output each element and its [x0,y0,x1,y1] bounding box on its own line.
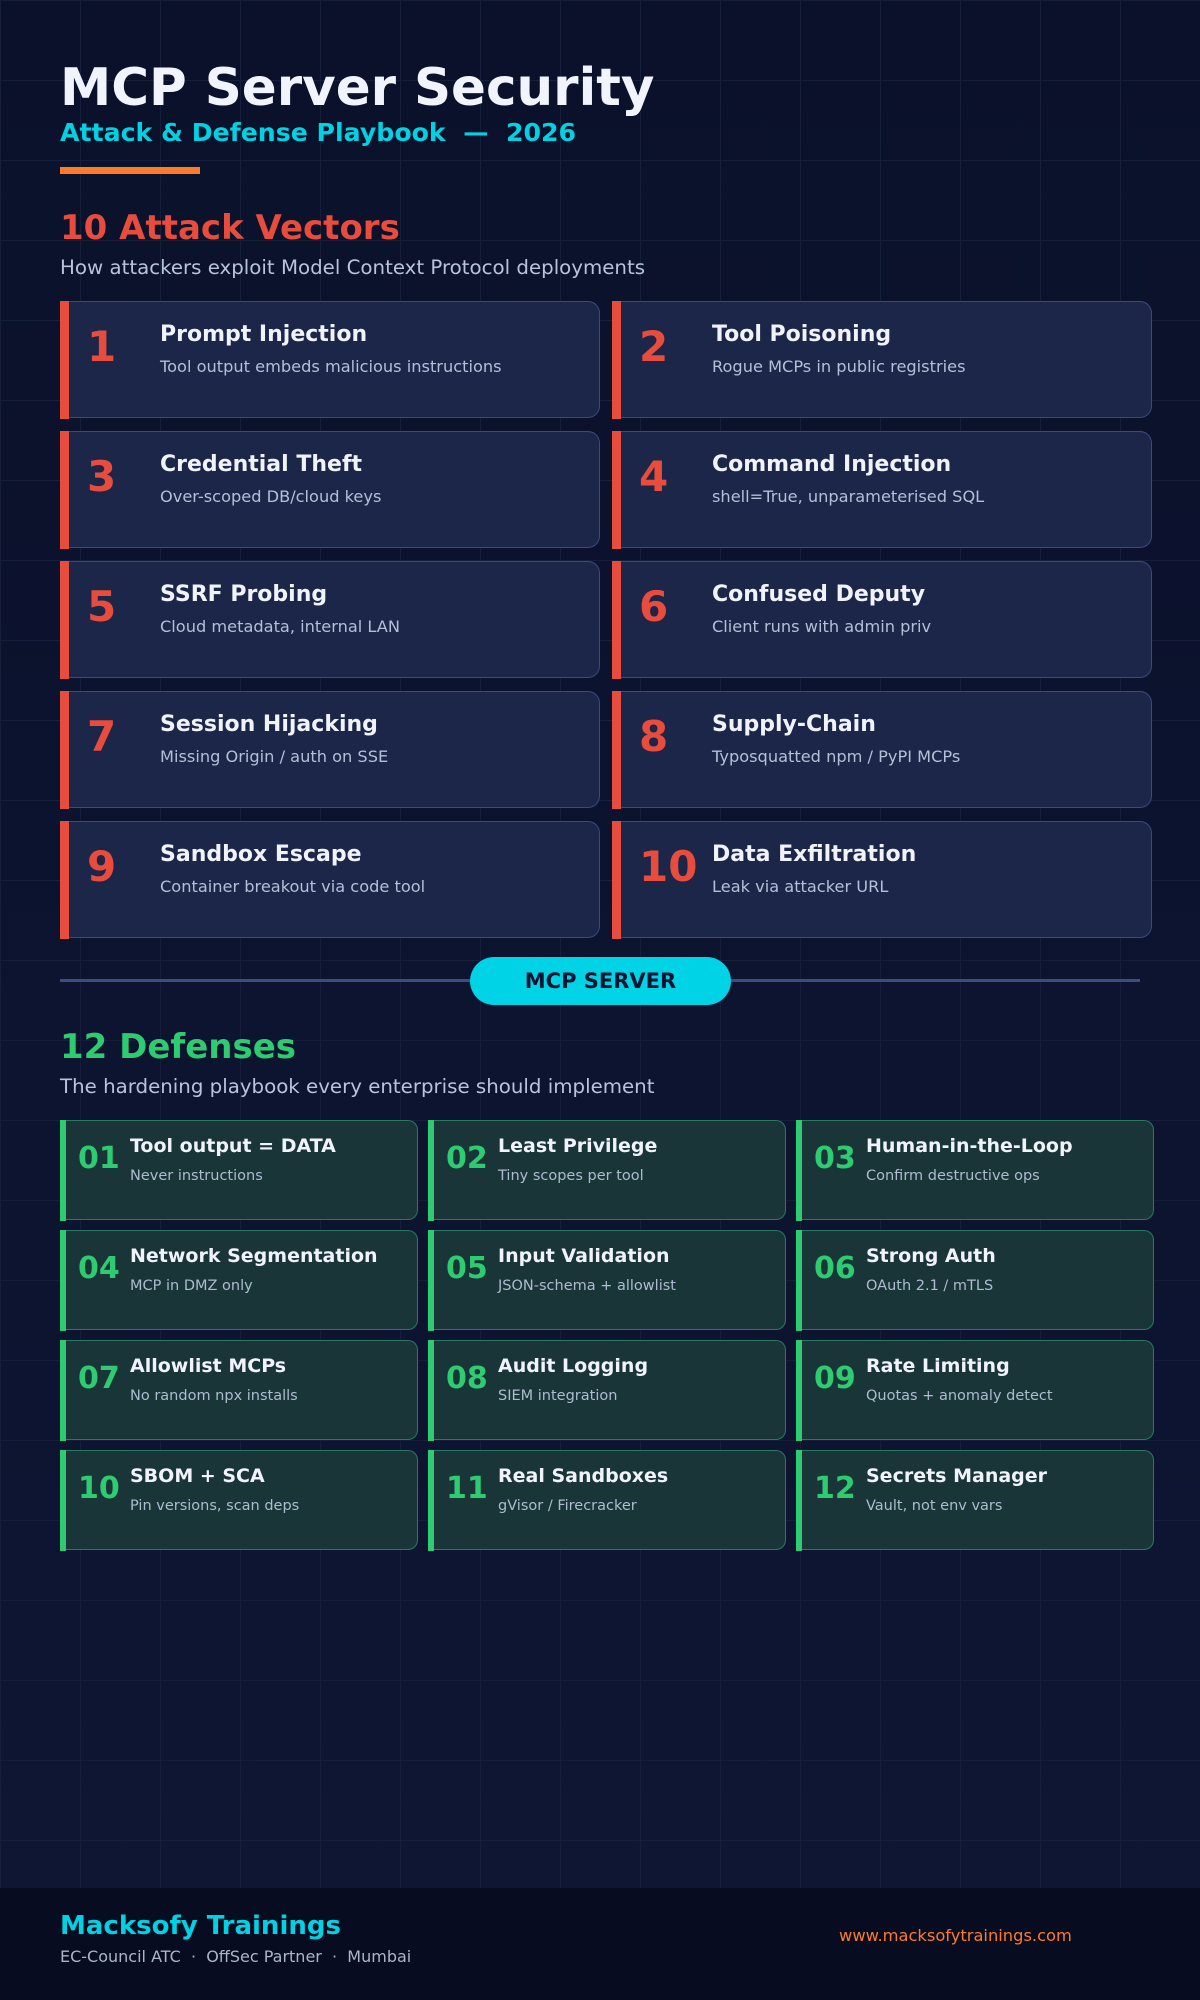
attack subtitle: How attackers exploit Model Context Protocol deployments [60,256,645,279]
attack 2: 2 [639,322,668,371]
defense 06: Strong Auth [866,1245,996,1267]
defenses subtitle: The hardening playbook every enterprise should implement [60,1075,654,1098]
attack 2: Tool Poisoning [712,322,891,347]
attack 5: 5 [87,582,116,631]
defense 02: Least Privilege [498,1135,657,1157]
defense 08: SIEM integration [498,1388,617,1404]
attack 6: Confused Deputy [712,582,925,607]
defense 12 [796,1450,1154,1550]
attack 9: 9 [87,842,116,891]
attack 3 [60,431,600,548]
attack 6: Client runs with admin priv [712,617,931,636]
defense 03: Confirm destructive ops [866,1168,1040,1184]
defense 02: Tiny scopes per tool [498,1168,644,1184]
attack 6 [612,561,1152,678]
defense 05: JSON-schema + allowlist [498,1278,676,1294]
defense 12: Secrets Manager [866,1465,1047,1487]
defense 03: Human-in-the-Loop [866,1135,1073,1157]
defense 10 [60,1450,418,1550]
title: MCP Server Security [60,58,654,118]
attack 8: Typosquatted npm / PyPI MCPs [712,747,960,766]
defense 06: 06 [814,1251,856,1286]
attack 4 [612,431,1152,548]
attack 7 [60,691,600,808]
attack 8: 8 [639,712,668,761]
defense 09 [796,1340,1154,1440]
defense 04: Network Segmentation [130,1245,378,1267]
attack 5: Cloud metadata, internal LAN [160,617,400,636]
attack 9 [60,821,600,938]
defense 01: Never instructions [130,1168,263,1184]
attack 2: Rogue MCPs in public registries [712,357,966,376]
defense 12: 12 [814,1471,856,1506]
attack 3: Over-scoped DB/cloud keys [160,487,381,506]
attack 4: 4 [639,452,668,501]
defense 10: SBOM + SCA [130,1465,265,1487]
defense 03: 03 [814,1141,856,1176]
attack 7: Session Hijacking [160,712,378,737]
attack 7: Missing Origin / auth on SSE [160,747,388,766]
MCP server pill [470,957,731,1005]
attack 8 [612,691,1152,808]
defense 08 [428,1340,786,1440]
defense 10: Pin versions, scan deps [130,1498,299,1514]
defense 09: 09 [814,1361,856,1396]
defense 05: Input Validation [498,1245,670,1267]
defense 07: 07 [78,1361,120,1396]
attack 5: SSRF Probing [160,582,327,607]
defense 08: Audit Logging [498,1355,648,1377]
attack 4: shell=True, unparameterised SQL [712,487,984,506]
defense 11: 11 [446,1471,488,1506]
footer [0,1888,1200,2000]
defense 08: 08 [446,1361,488,1396]
panel: defenses grid [60,1120,1154,1551]
attack 2 [612,301,1152,418]
defense 01: Tool output = DATA [130,1135,336,1157]
defense 12: Vault, not env vars [866,1498,1002,1514]
attack 4: Command Injection [712,452,951,477]
attack 7: 7 [87,712,116,761]
attack 9: Sandbox Escape [160,842,362,867]
attack 1: Tool output embeds malicious instructions [160,357,502,376]
defense 10: 10 [78,1471,120,1506]
defense 01 [60,1120,418,1220]
defense 07 [60,1340,418,1440]
attack 3: 3 [87,452,116,501]
attack 10: Data Exfiltration [712,842,916,867]
footer url: www.macksofytrainings.com [839,1926,1072,1945]
heading: defenses: 12 Defenses [60,1027,296,1067]
defense 11 [428,1450,786,1550]
MCP server pill: MCP SERVER [525,969,676,993]
defense 01: 01 [78,1141,120,1176]
attack 9: Container breakout via code tool [160,877,425,896]
heading: attack vectors: 10 Attack Vectors [60,208,400,248]
defense 04: 04 [78,1251,120,1286]
defense 09: Rate Limiting [866,1355,1010,1377]
defense 04 [60,1230,418,1330]
orange accent bar [60,167,200,174]
panel: attack vectors grid [60,301,1152,939]
defense 11: Real Sandboxes [498,1465,668,1487]
defense 07: No random npx installs [130,1388,298,1404]
attack 1: 1 [87,322,116,371]
attack 3: Credential Theft [160,452,362,477]
defense 06 [796,1230,1154,1330]
defense 11: gVisor / Firecracker [498,1498,637,1514]
attack 1: Prompt Injection [160,322,367,347]
attack 1 [60,301,600,418]
defense 02: 02 [446,1141,488,1176]
attack 10: 10 [639,842,697,891]
defense 05 [428,1230,786,1330]
footer tagline: EC-Council ATC · OffSec Partner · Mumbai [60,1947,411,1966]
attack 6: 6 [639,582,668,631]
attack 10: Leak via attacker URL [712,877,888,896]
defense 06: OAuth 2.1 / mTLS [866,1278,993,1294]
subtitle: Attack & Defense Playbook — 2026 [60,118,576,147]
attack 8: Supply-Chain [712,712,876,737]
footer brand: Macksofy Trainings [60,1911,341,1941]
attack 10 [612,821,1152,938]
defense 09: Quotas + anomaly detect [866,1388,1053,1404]
defense 05: 05 [446,1251,488,1286]
defense 07: Allowlist MCPs [130,1355,286,1377]
defense 02 [428,1120,786,1220]
attack 5 [60,561,600,678]
defense 03 [796,1120,1154,1220]
defense 04: MCP in DMZ only [130,1278,253,1294]
